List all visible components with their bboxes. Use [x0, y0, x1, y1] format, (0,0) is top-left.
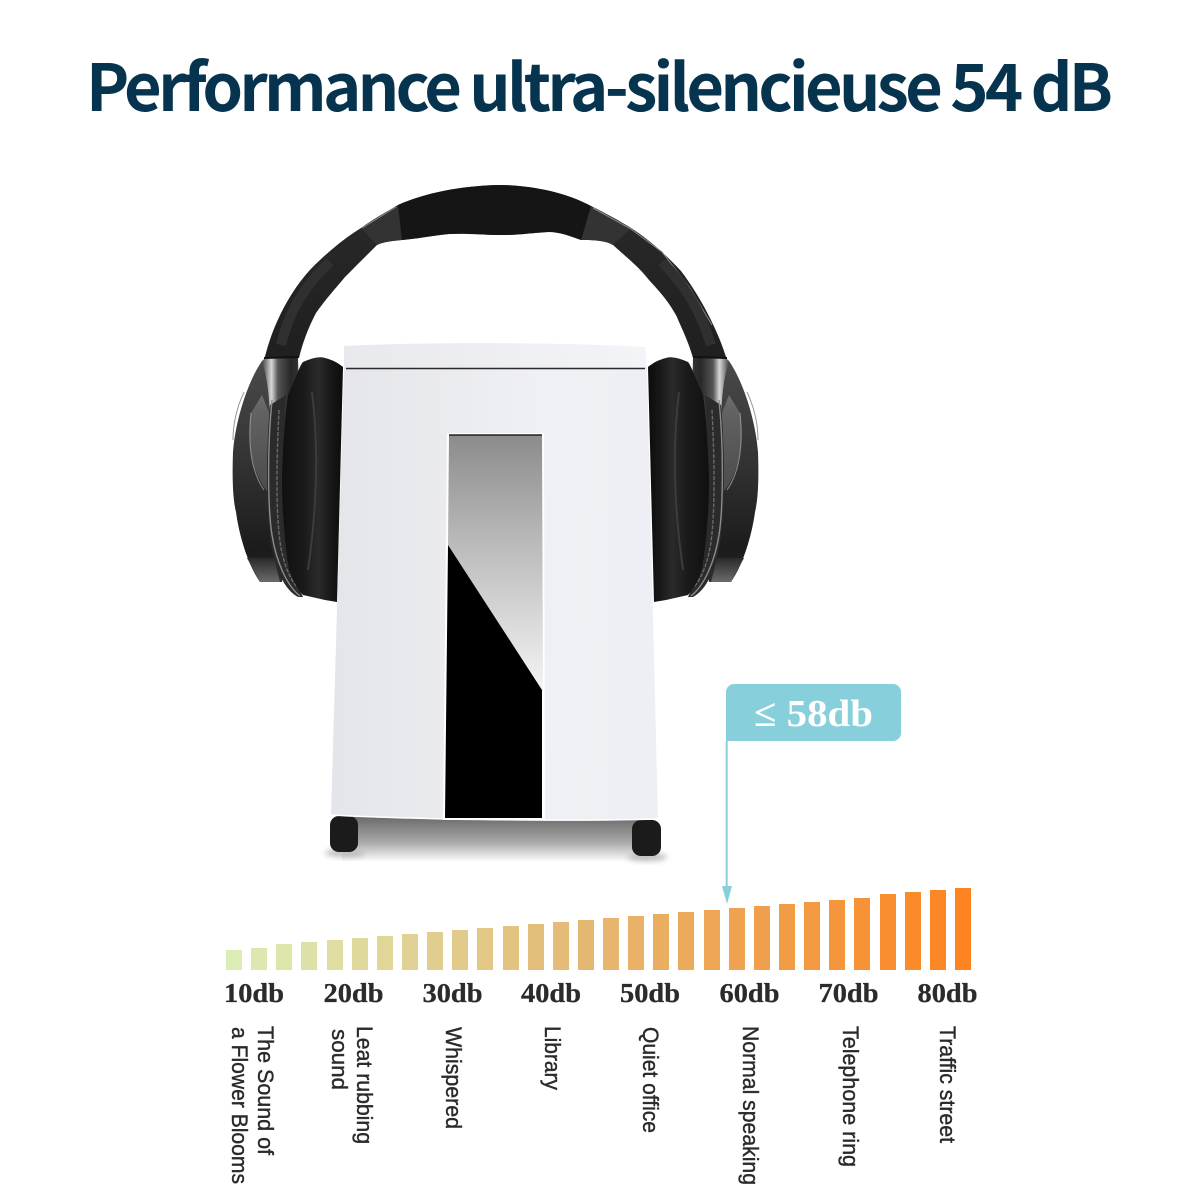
decibel labels: 40db — [521, 978, 581, 1008]
floor shadow — [325, 816, 667, 862]
rotated sound captions: Library — [540, 1026, 565, 1090]
lid — [344, 343, 647, 368]
rotated sound captions: Leat rubbing — [352, 1026, 377, 1144]
right ear cup — [648, 357, 758, 602]
decibel labels — [224, 978, 978, 1008]
decibel labels: 10db — [224, 978, 284, 1008]
title: Performance ultra-silencieuse 54 dB — [86, 36, 1113, 130]
decibel labels: 80db — [918, 978, 978, 1008]
left ear cup — [233, 357, 343, 602]
rotated sound captions: Quiet office — [638, 1027, 663, 1133]
headband — [264, 185, 727, 361]
decibel labels: 20db — [324, 978, 384, 1008]
decibel labels: 60db — [720, 978, 780, 1008]
rotated sound captions: Traffic street — [935, 1026, 960, 1143]
rotated sound captions — [227, 1026, 960, 1185]
left caster — [330, 816, 358, 852]
right caster — [632, 820, 661, 856]
rotated sound captions: a Flower Blooms — [227, 1027, 252, 1184]
callout box — [726, 684, 901, 741]
bar chart: decibel scale — [226, 888, 971, 970]
rotated sound captions: The Sound of — [253, 1026, 278, 1156]
decibel labels: 50db — [620, 978, 680, 1008]
arrow head — [722, 886, 732, 904]
arrow line — [726, 741, 728, 890]
window — [443, 433, 545, 820]
shredder — [325, 343, 667, 862]
cabinet body — [331, 368, 658, 820]
bottom edge — [331, 815, 658, 820]
decibel labels: 30db — [422, 978, 482, 1008]
rotated sound captions: Telephone ring — [838, 1026, 863, 1167]
icon: headphones — [233, 185, 758, 602]
callout: 58 dB marker — [722, 684, 901, 904]
callout value: ≤ 58db — [754, 693, 873, 735]
rotated sound captions: sound — [327, 1029, 352, 1090]
rotated sound captions: Normal speaking — [738, 1026, 763, 1185]
decibel labels: 70db — [818, 978, 878, 1008]
lid seam — [346, 368, 645, 370]
rotated sound captions: Whispered — [441, 1027, 466, 1129]
